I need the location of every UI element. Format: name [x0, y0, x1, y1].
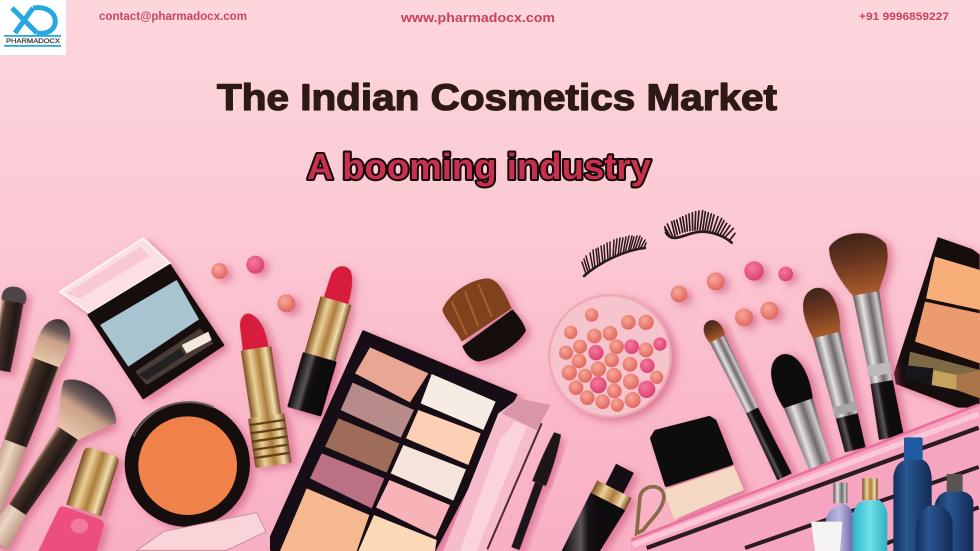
foundation bottle: [652, 418, 743, 518]
logo: Pharmadocx: [0, 0, 66, 55]
bottle: cyan: [853, 478, 887, 551]
mascara tube: [562, 460, 642, 551]
subtitle: A booming industry: [307, 146, 651, 187]
key ring: [637, 487, 664, 533]
eyelash: left: [582, 236, 646, 276]
bottle: navy small back: [935, 474, 973, 551]
clear lid: [137, 513, 266, 550]
header: contact email: contact@pharmadocx.com: [99, 11, 247, 23]
beads: [671, 261, 793, 326]
brush: fan: [0, 371, 126, 551]
bottle: lilac: [826, 483, 853, 551]
white tube: [811, 522, 842, 551]
right group of cosmetics: [630, 211, 980, 551]
lipstick: gold: [233, 310, 292, 468]
bottle: navy tall: [893, 437, 932, 551]
logo: Pharmadocx: PHARMADOCX: [6, 39, 60, 45]
brush: medium brown: [798, 284, 872, 454]
blush compact: [125, 402, 250, 527]
header: website: www.pharmadocx.com: [400, 10, 555, 25]
nail polish: [38, 446, 120, 551]
mascara wand: [508, 431, 564, 551]
kabuki brush: [442, 278, 526, 362]
clear perfume bottle: [443, 398, 551, 551]
eyelash: right: [665, 211, 735, 243]
compact: right: [895, 238, 980, 407]
brush: medium: [0, 314, 77, 518]
brush: black: [764, 349, 837, 472]
blush pearl jar: [549, 295, 671, 417]
left group of cosmetics: [0, 238, 295, 551]
brush: cropped top-left: [0, 285, 28, 373]
cosmetic bag with zipper: [630, 404, 980, 551]
lipstick: black: [287, 262, 363, 417]
eyeshadow compact: [60, 238, 223, 398]
title: The Indian Cosmetics Market: [217, 77, 777, 118]
middle group of cosmetics: [271, 262, 671, 551]
brush: thin: [700, 317, 793, 481]
beads: [211, 256, 295, 312]
roll-on bottle: [916, 505, 953, 551]
header: phone: +91 9996859227: [859, 11, 949, 23]
eyeshadow palette: [271, 332, 516, 551]
brush: large brown: [827, 228, 920, 443]
